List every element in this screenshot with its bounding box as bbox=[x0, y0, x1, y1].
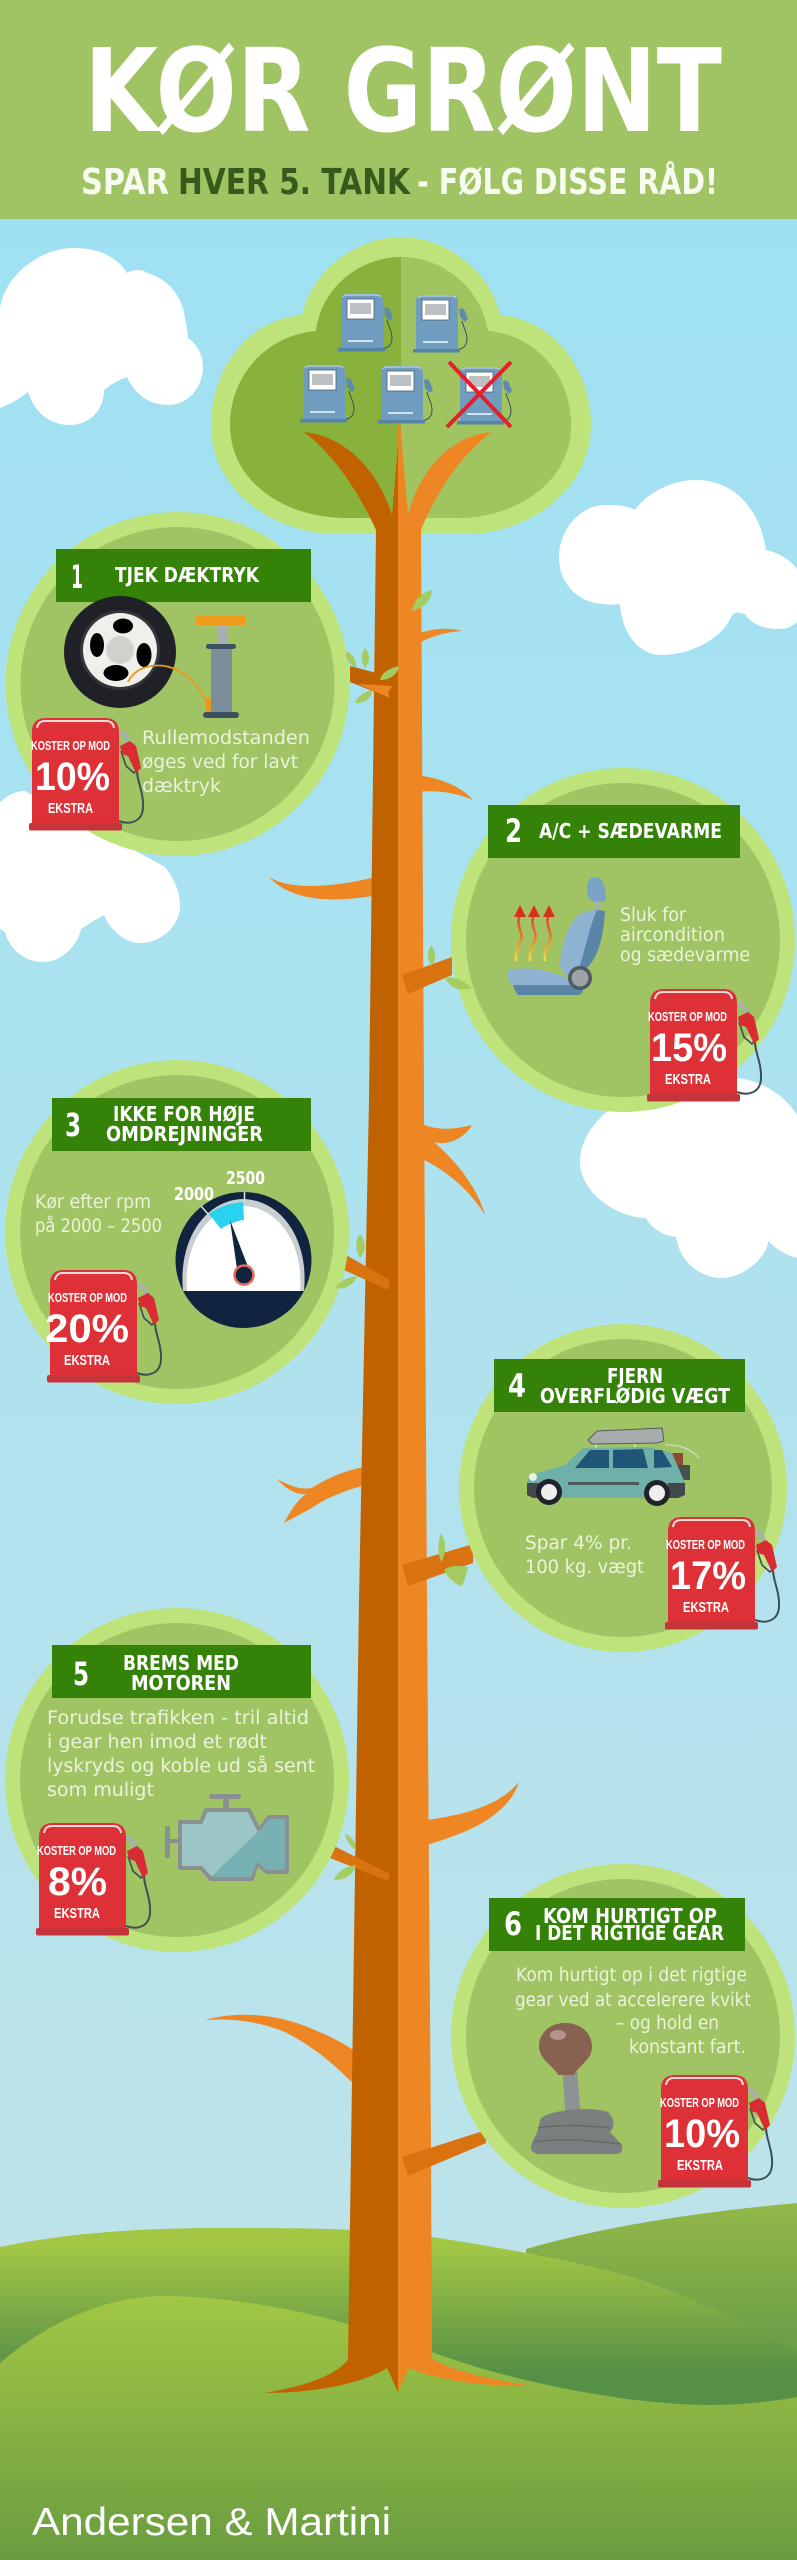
fuel pump badge 15%: 15% bbox=[651, 1026, 727, 1070]
fuel pump badge 10%: EKSTRA bbox=[48, 801, 93, 817]
panel 6: shift up quickly bbox=[451, 1864, 795, 2208]
cloud: top right bbox=[559, 480, 797, 655]
heading 6: I DET RIGTIGE GEAR bbox=[535, 1921, 724, 1945]
fuel pump badge 17%: KOSTER OP MOD bbox=[666, 1538, 745, 1552]
branch stubs bbox=[330, 666, 486, 2176]
fuel pump badge 10% bbox=[29, 718, 143, 830]
fuel pump icons in crown bbox=[300, 294, 512, 424]
fuel pump badge 17% bbox=[665, 1517, 779, 1630]
heading 2: A/C + SÆDEVARME bbox=[539, 819, 722, 843]
fuel pump badge 10%: 10% bbox=[35, 755, 110, 799]
fuel pump badge 15%: EKSTRA bbox=[665, 1072, 711, 1088]
side branches bbox=[205, 629, 519, 2096]
icon: rev gauge bbox=[174, 1168, 312, 1328]
cloud: middle left bbox=[0, 791, 180, 962]
text: braking advice: i gear hen imod et rødt bbox=[47, 1732, 267, 1753]
text: gear advice: – og hold en bbox=[616, 2013, 719, 2034]
text: rpm advice bbox=[35, 1192, 162, 1237]
text: weight advice: Spar 4% pr. bbox=[525, 1533, 632, 1554]
fuel pump badge 17%: EKSTRA bbox=[683, 1600, 729, 1616]
text: seat heating advice bbox=[620, 905, 750, 966]
text: gear advice bbox=[515, 1965, 751, 2058]
heading 4: OVERFLØDIG VÆGT bbox=[540, 1384, 730, 1408]
icon: car with roof box bbox=[527, 1428, 699, 1506]
fuel pump badge 10% second: KOSTER OP MOD bbox=[660, 2096, 739, 2110]
heading 3: 3 bbox=[65, 1106, 81, 1144]
heading 4: FJERN bbox=[607, 1364, 663, 1388]
text: tire pressure advice bbox=[142, 728, 310, 797]
heading 1: 1 bbox=[71, 558, 83, 596]
heading 4 bbox=[494, 1359, 745, 1412]
fuel pump badge 8%: KOSTER OP MOD bbox=[37, 1844, 116, 1858]
heading 5: 5 bbox=[73, 1655, 89, 1693]
cloud: middle right bbox=[580, 1078, 797, 1278]
fuel pump badge 8%: EKSTRA bbox=[54, 1906, 100, 1922]
hills bbox=[0, 2203, 797, 2560]
cloud: top left bbox=[0, 248, 203, 425]
heading 6: 6 bbox=[504, 1905, 522, 1943]
text: braking advice bbox=[47, 1708, 315, 1801]
leaves on branches bbox=[334, 590, 472, 1880]
heading 5: BREMS MED bbox=[123, 1651, 239, 1675]
panel 2: A/C and seat heating bbox=[451, 768, 795, 1112]
fuel pump badge 10%: KOSTER OP MOD bbox=[31, 739, 110, 753]
icon: tire bbox=[64, 596, 176, 708]
red cross over fifth pump bbox=[447, 362, 511, 427]
icon: engine bbox=[165, 1794, 287, 1879]
text: seat heating advice: og sædevarme bbox=[620, 945, 750, 966]
text: tire pressure advice: øges ved for lavt bbox=[142, 752, 298, 773]
text: weight advice bbox=[525, 1533, 644, 1578]
subtitle: HVER 5. TANK bbox=[178, 162, 411, 203]
text: tire pressure advice: dæktryk bbox=[142, 776, 221, 797]
fuel pump badge 15%: KOSTER OP MOD bbox=[648, 1010, 727, 1024]
icon: rev gauge: 2500 bbox=[226, 1168, 265, 1189]
heading 4: 4 bbox=[508, 1367, 526, 1405]
panel 1: tire pressure bbox=[6, 512, 350, 856]
fuel pump badge 8%: 8% bbox=[48, 1860, 107, 1904]
fuel pump badge 20%: KOSTER OP MOD bbox=[48, 1291, 127, 1305]
heading 2: 2 bbox=[505, 812, 522, 850]
text: braking advice: som muligt bbox=[47, 1780, 154, 1801]
subtitle: SPAR bbox=[81, 162, 169, 203]
heading 5 bbox=[52, 1645, 311, 1698]
heading 6: KOM HURTIGT OP bbox=[543, 1904, 717, 1928]
panel 4: remove excess weight bbox=[459, 1324, 787, 1652]
subtitle bbox=[81, 161, 718, 203]
heading 3: OMDREJNINGER bbox=[106, 1122, 263, 1146]
heading 5: MOTOREN bbox=[131, 1671, 231, 1695]
icon: rev gauge: 2000 bbox=[174, 1184, 214, 1205]
text: tire pressure advice: Rullemodstanden bbox=[142, 728, 310, 749]
fuel pump badge 17%: 17% bbox=[670, 1554, 746, 1598]
tree trunk bbox=[265, 423, 534, 2393]
heading 2 bbox=[488, 805, 740, 858]
fuel pump badge 20%: 20% bbox=[45, 1307, 129, 1351]
tree crown bbox=[211, 237, 591, 534]
fuel pump badge 8% bbox=[36, 1823, 150, 1936]
panel 5: engine braking bbox=[5, 1608, 349, 1952]
heading 3: IKKE FOR HØJE bbox=[113, 1102, 255, 1126]
heading 1 bbox=[56, 549, 311, 602]
text: gear advice: konstant fart. bbox=[629, 2037, 746, 2058]
heading 6 bbox=[489, 1898, 745, 1951]
fuel pump badge 20% bbox=[45, 1270, 161, 1382]
text: braking advice: Forudse trafikken - tril altid bbox=[47, 1708, 309, 1729]
text: rpm advice: på 2000 – 2500 bbox=[35, 1216, 162, 1237]
subtitle: - FØLG DISSE RÅD! bbox=[417, 161, 718, 203]
icon: heated seat bbox=[507, 877, 606, 995]
text: seat heating advice: aircondition bbox=[620, 925, 725, 946]
header band bbox=[0, 0, 797, 219]
fuel pump badge 20%: EKSTRA bbox=[64, 1353, 110, 1369]
text: gear advice: Kom hurtigt op i det rigtige bbox=[516, 1965, 747, 1986]
brand name: Andersen & Martini bbox=[32, 2501, 391, 2544]
icon: air pump bbox=[128, 616, 245, 718]
fuel pump badge 10% second: EKSTRA bbox=[677, 2158, 723, 2174]
text: weight advice: 100 kg. vægt bbox=[525, 1557, 644, 1578]
heading 3 bbox=[52, 1098, 311, 1151]
text: braking advice: lyskryds og koble ud så sent bbox=[47, 1756, 315, 1777]
text: rpm advice: Kør efter rpm bbox=[35, 1192, 151, 1213]
heading 1: TJEK DÆKTRYK bbox=[115, 563, 260, 587]
fuel pump badge 15% bbox=[647, 989, 761, 1102]
fuel pump badge 10% second bbox=[658, 2075, 772, 2188]
fuel pump badge 10% second: 10% bbox=[664, 2112, 740, 2156]
text: gear advice: gear ved at accelerere kvikt bbox=[515, 1990, 751, 2011]
text: seat heating advice: Sluk for bbox=[620, 905, 686, 926]
icon: gear stick bbox=[531, 2023, 622, 2154]
panel 3: engine revolutions bbox=[5, 1060, 349, 1404]
